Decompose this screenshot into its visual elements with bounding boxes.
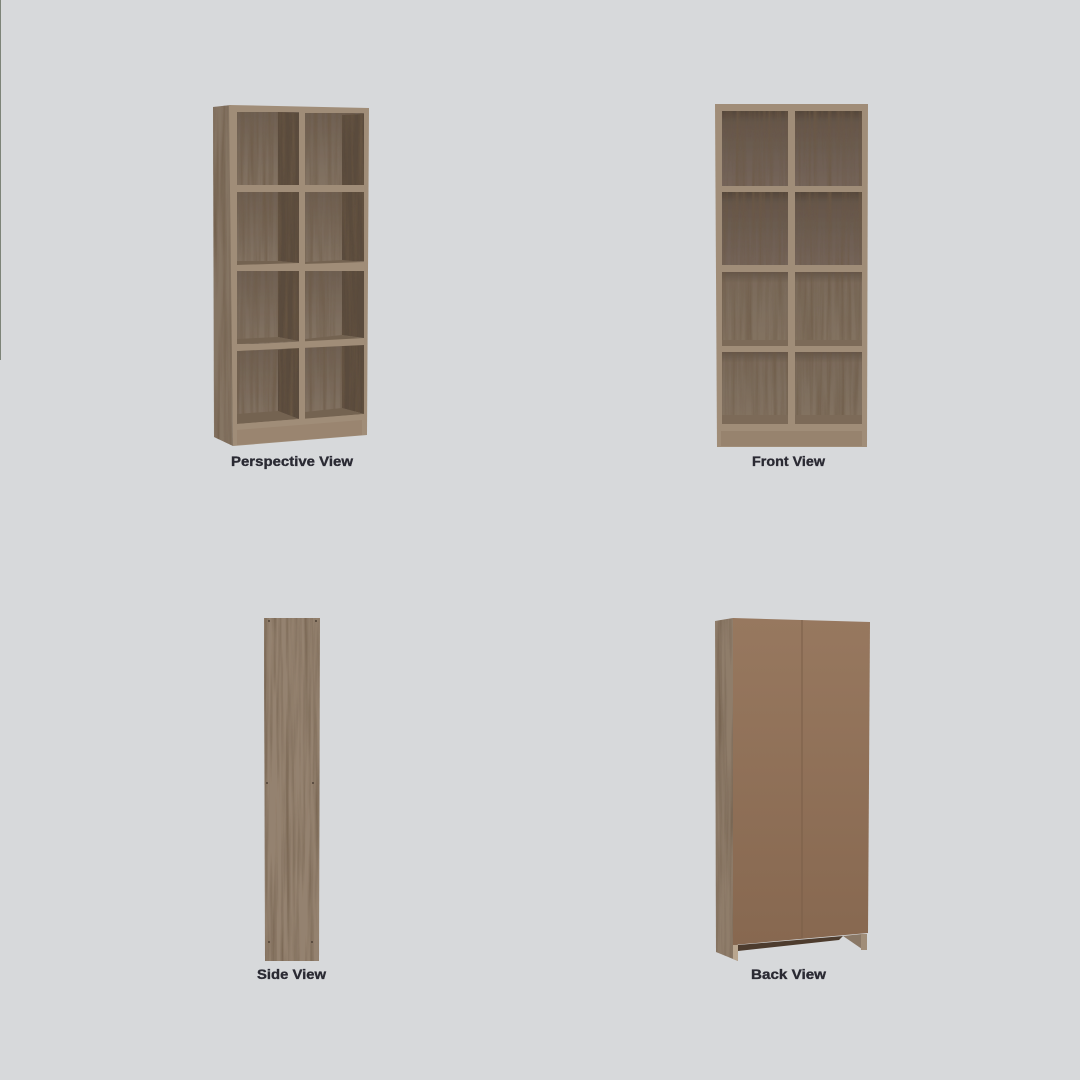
compartments: [237, 112, 364, 422]
product view: front: [715, 104, 868, 447]
front edge of base: [733, 945, 738, 961]
product view: side: [264, 618, 320, 961]
outer frame: [715, 104, 868, 447]
product view: perspective: [213, 105, 369, 446]
outer side panel: [213, 105, 233, 446]
front frame: [229, 105, 369, 446]
compartments: [722, 111, 862, 424]
shelf top surfaces: [237, 260, 364, 424]
label: side view: Side View: [257, 966, 326, 982]
dark inner dividers: [278, 112, 364, 419]
product view: back: [715, 618, 870, 961]
screw holes: [266, 620, 317, 943]
side panel: [715, 618, 738, 961]
underside gap: [738, 936, 843, 951]
base plinth: [721, 431, 862, 446]
label: back view: Back View: [751, 966, 826, 982]
right leg: [843, 934, 862, 949]
label: perspective view: Perspective View: [231, 453, 353, 469]
shelf surfaces: [722, 340, 862, 424]
label: front view: Front View: [752, 453, 825, 469]
center seam: [801, 620, 803, 938]
shelf fronts and base: [237, 112, 364, 445]
side panel: [264, 618, 320, 961]
back board: [733, 618, 870, 945]
left edge line: [0, 0, 1, 360]
